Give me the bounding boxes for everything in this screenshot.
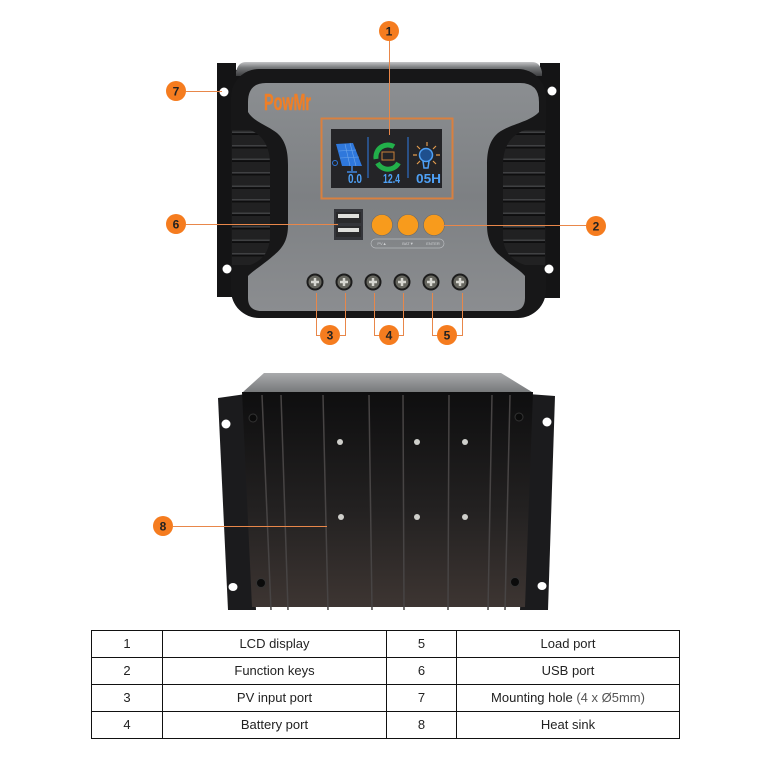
key labels: [371, 239, 444, 248]
marker 5: 5: [444, 328, 451, 342]
rear mounting holes: [222, 418, 552, 591]
LCD callout frame: [322, 118, 452, 198]
parts legend table: [91, 630, 680, 739]
marker 7: 7: [173, 84, 180, 98]
mounting plate: [217, 63, 560, 298]
marker 7: [166, 81, 186, 101]
parts legend table: PV input port: [237, 690, 312, 705]
LCD screen: [331, 129, 442, 188]
right heat grille: [503, 130, 545, 265]
heat sink fins: [262, 395, 510, 610]
mounting holes: [220, 86, 556, 274]
corner screws: [249, 413, 523, 588]
marker 1: [379, 21, 399, 41]
function keys: [372, 214, 444, 236]
marker 5: [437, 325, 457, 345]
black housing: [231, 69, 546, 318]
callout leader lines: [173, 40, 586, 526]
parts legend table: USB port: [542, 663, 594, 678]
battery reading: 12.4: [383, 171, 401, 186]
terminal screws: [308, 274, 468, 290]
parts legend table: 7: [418, 690, 425, 705]
rear view of controller: [218, 373, 555, 610]
marker 3: [320, 325, 340, 345]
top surface: [243, 373, 532, 392]
key labels: PV▲: [377, 241, 387, 246]
callout markers: [153, 21, 606, 536]
left heat grille: [232, 130, 270, 265]
silver top edge: [236, 62, 542, 76]
marker 4: [379, 325, 399, 345]
divider: [368, 137, 408, 178]
left mounting flange: [218, 394, 256, 610]
key labels: BAT▼: [402, 241, 414, 246]
PV reading: 0.0: [348, 171, 362, 186]
parts legend table: Mounting hole (4 x Ø5mm): [491, 690, 645, 705]
heat sink body: [242, 392, 533, 607]
key labels: ENTER: [426, 241, 440, 246]
brand logo: PowMr: [264, 89, 311, 115]
rear studs: [337, 439, 468, 520]
marker 6: [166, 214, 186, 234]
grey front face: [248, 83, 539, 311]
solar panel icon: [332, 143, 362, 172]
load timer reading: 05H: [416, 171, 441, 186]
marker 2: [586, 216, 606, 236]
parts legend table: 6: [418, 663, 425, 678]
parts legend table: Function keys: [234, 663, 315, 678]
parts legend table: 1: [123, 636, 131, 651]
parts legend table: 3: [123, 690, 131, 705]
marker 2: 2: [593, 220, 600, 234]
parts legend table: Load port: [541, 636, 595, 651]
parts legend table: 4: [123, 717, 131, 732]
marker 4: 4: [386, 328, 393, 342]
parts legend table: 5: [418, 636, 425, 651]
right mounting flange: [520, 394, 555, 610]
marker 1: 1: [386, 24, 393, 38]
marker 8: 8: [160, 520, 167, 534]
battery ring icon: [376, 145, 398, 169]
light bulb icon: [413, 142, 440, 168]
parts legend table: LCD display: [239, 636, 310, 651]
parts legend table: 8: [418, 717, 425, 732]
parts legend table: Heat sink: [541, 717, 595, 732]
marker 8: [153, 516, 173, 536]
marker 6: 6: [173, 218, 180, 232]
screw highlights: [311, 278, 464, 286]
parts legend table: Battery port: [241, 717, 308, 732]
parts legend table: 2: [123, 663, 131, 678]
USB port: [334, 209, 363, 240]
marker 3: 3: [327, 328, 334, 342]
front view of controller: [217, 62, 560, 318]
